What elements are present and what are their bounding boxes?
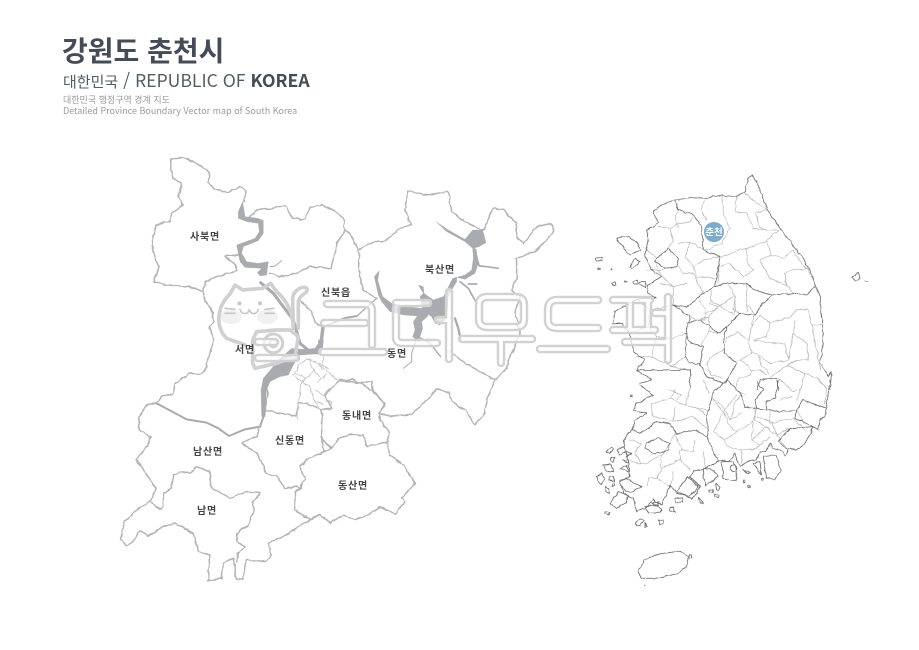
marker: 춘천	[704, 222, 724, 242]
label: 남면: 남면	[197, 502, 217, 517]
label: 동면: 동면	[387, 345, 407, 360]
map: Chuncheon districts	[121, 157, 553, 581]
title: 강원도 춘천시	[62, 30, 224, 70]
label: 동산면: 동산면	[338, 477, 368, 492]
label: 신북읍: 신북읍	[321, 284, 351, 299]
watermark	[219, 283, 668, 368]
label: 신동면: 신동면	[275, 432, 305, 447]
subtitle: 대한민국 / REPUBLIC OF KOREA	[63, 68, 310, 93]
marker: 춘천: 춘천	[705, 224, 723, 238]
label: 남산면: 남산면	[193, 443, 223, 458]
label: 서면: 서면	[235, 341, 255, 356]
watermark: cat	[219, 283, 307, 368]
regional boundaries and islands	[596, 175, 867, 587]
river: Sinbuk channel	[320, 298, 377, 352]
description text: 대한민국 행정구역 경계 지도	[63, 93, 170, 106]
river: south channel	[157, 402, 264, 436]
district boundaries	[121, 157, 553, 581]
river: Soyang and Bukhan	[157, 202, 498, 436]
river: north-west arm	[237, 202, 320, 353]
label: 북산면: 북산면	[425, 261, 455, 276]
watermark: lettering bands	[258, 292, 668, 363]
map: South Korea	[596, 175, 867, 587]
description text english: Detailed Province Boundary Vector map of South Korea	[63, 104, 297, 117]
river: central lake	[261, 340, 323, 417]
river: Soyang lake	[374, 222, 498, 368]
label: 동내면: 동내면	[342, 407, 372, 422]
label: 사북면: 사북면	[190, 228, 220, 243]
